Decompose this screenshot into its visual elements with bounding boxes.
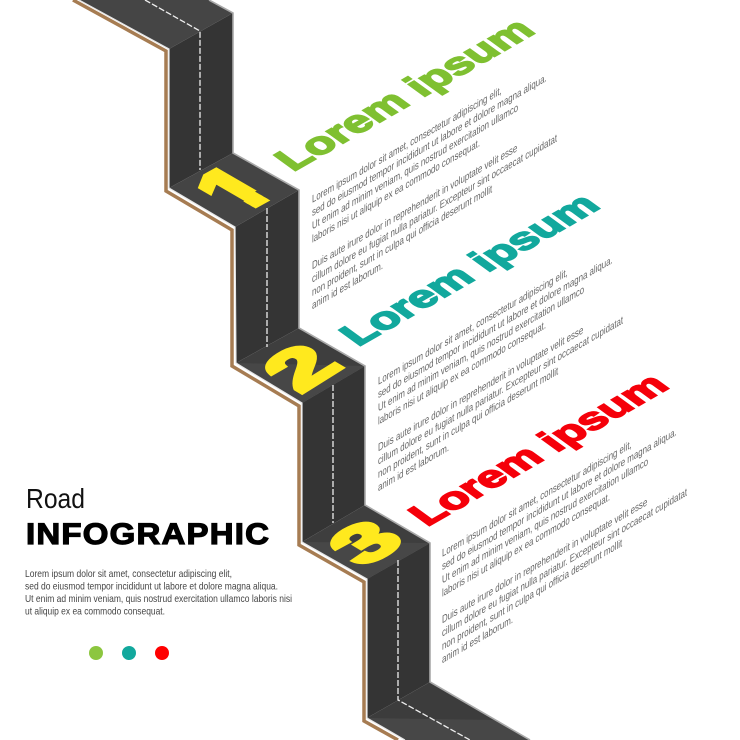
- title: [26, 483, 270, 551]
- section 1 text: cillum dolore eu fugiat nulla pariatur. Excepteur sint occaecat cupidatat: [312, 132, 557, 286]
- colour legend dots: [89, 646, 169, 660]
- intro text block: sed do eiusmod tempor incididunt ut labore et dolore magna aliqua.: [25, 580, 278, 592]
- section 3 text: Ut enim ad minim veniam, quis nostrud exercitation ullamco: [442, 456, 648, 587]
- section 2 text: non proident, sunt in culpa qui officia deserunt mollit: [378, 365, 558, 481]
- section 3 text: sed do eiusmod tempor incididunt ut labore et dolore magna aliqua.: [442, 426, 677, 573]
- number 1: 1: [173, 153, 298, 224]
- section 2 text: Lorem ipsum dolor sit amet, consectetur adipiscing elit,: [378, 266, 568, 388]
- section 1 text: sed do eiusmod tempor incididunt ut labore et dolore magna aliqua.: [312, 72, 547, 219]
- section 1 heading: Lorem ipsum: [265, 12, 543, 177]
- title: INFOGRAPHIC: [26, 516, 270, 551]
- section 2 text: Ut enim ad minim veniam, quis nostrud exercitation ullamco: [378, 284, 584, 415]
- section 2 text: laboris nisi ut aliquip ex ea commodo consequat.: [378, 319, 546, 428]
- section 2 text: cillum dolore eu fugiat nulla pariatur. Excepteur sint occaecat cupidatat: [378, 314, 623, 468]
- section 1 text: Duis aute irure dolor in reprehenderit in voluptate velit esse: [312, 142, 517, 273]
- number 3: 3: [311, 510, 420, 576]
- section 1 text: non proident, sunt in culpa qui officia deserunt mollit: [312, 183, 492, 299]
- intro text block: ut aliquip ex ea commodo consequat.: [25, 606, 165, 618]
- section 2 text: [378, 234, 623, 494]
- section 1 text: Ut enim ad minim veniam, quis nostrud exercitation ullamco: [312, 102, 518, 233]
- number 2: 2: [244, 333, 358, 402]
- section 3 text: Duis aute irure dolor in reprehenderit in voluptate velit esse: [442, 496, 647, 627]
- intro text block: Ut enim ad minim veniam, quis nostrud exercitation ullamco laboris nisi: [25, 593, 292, 605]
- section 2 text: sed do eiusmod tempor incididunt ut labore et dolore magna aliqua.: [378, 254, 613, 401]
- section 1 text: [312, 52, 557, 312]
- section 3 heading: Lorem ipsum: [399, 367, 677, 532]
- section 1 text: anim id est laborum.: [312, 259, 383, 312]
- section 3 text: cillum dolore eu fugiat nulla pariatur. Excepteur sint occaecat cupidatat: [442, 486, 687, 640]
- title: Road: [26, 483, 85, 514]
- section 3 text: [442, 406, 687, 666]
- road: stepped isometric road: [73, 0, 530, 740]
- section 1 text: Lorem ipsum dolor sit amet, consectetur adipiscing elit,: [312, 84, 502, 206]
- section 3 text: anim id est laborum.: [442, 613, 513, 666]
- section 1 text: laboris nisi ut aliquip ex ea commodo consequat.: [312, 137, 480, 246]
- section 2 heading: Lorem ipsum: [330, 187, 608, 352]
- intro text block: Lorem ipsum dolor sit amet, consectetur adipiscing elit,: [25, 568, 232, 580]
- section 2 text: Duis aute irure dolor in reprehenderit in voluptate velit esse: [378, 324, 583, 455]
- section 3 text: Lorem ipsum dolor sit amet, consectetur adipiscing elit,: [442, 438, 632, 560]
- intro text block: [25, 568, 292, 618]
- section 3 text: non proident, sunt in culpa qui officia deserunt mollit: [442, 537, 622, 653]
- section 3 text: laboris nisi ut aliquip ex ea commodo consequat.: [442, 491, 610, 600]
- section 2 text: anim id est laborum.: [378, 441, 449, 494]
